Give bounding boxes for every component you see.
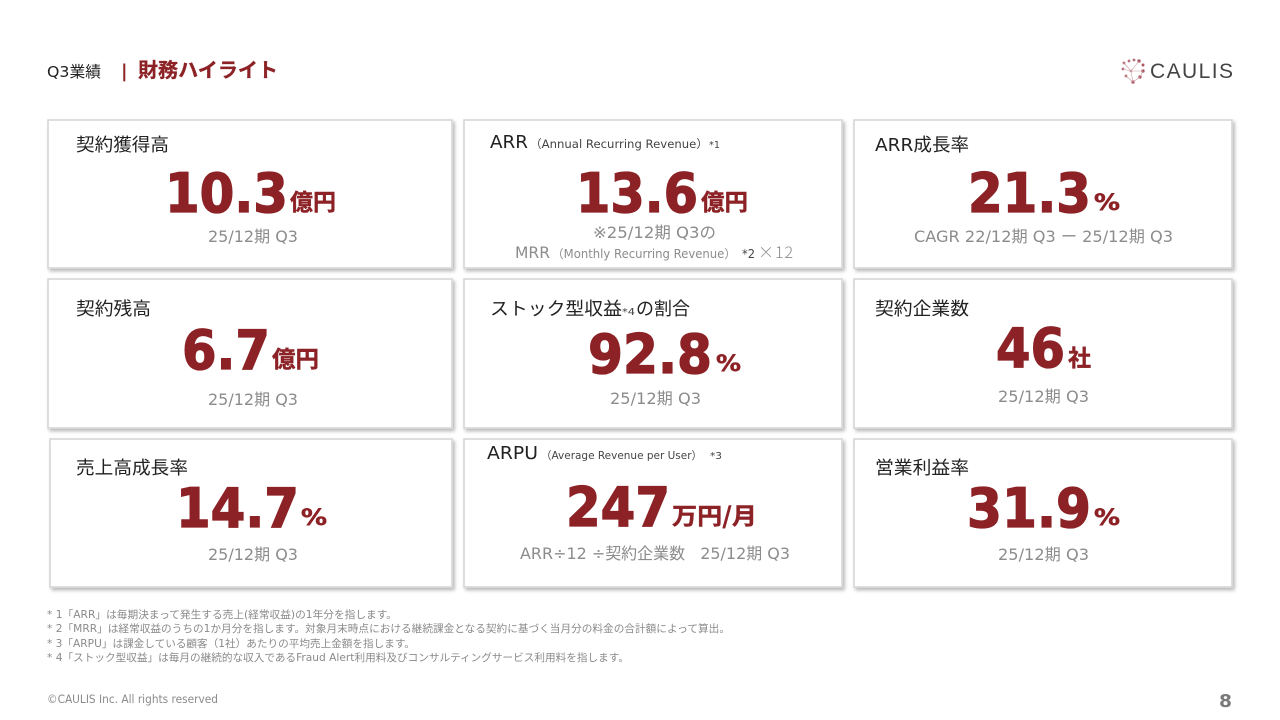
panel: ARR <box>464 120 842 268</box>
panel: ARPU: （Average Revenue per User） <box>541 449 702 462</box>
panel: ARR: *1 <box>709 140 720 151</box>
panel: ARR成長率: 21.3 <box>968 162 1091 225</box>
heading: 財務ハイライト <box>138 58 278 82</box>
panel: 契約残高 <box>48 279 452 428</box>
panel: 契約企業数: 25/12期 Q3 <box>998 387 1089 406</box>
panel: ARR: *2 <box>742 247 755 261</box>
panel: 契約獲得高: 25/12期 Q3 <box>208 227 298 246</box>
panel: ARPU: *3 <box>710 451 722 462</box>
heading <box>47 58 278 82</box>
panel: 契約残高: 億円 <box>272 340 319 374</box>
panel: 契約企業数 <box>854 279 1232 428</box>
panel: 営業利益率: 31.9 <box>967 477 1091 540</box>
panel: ARR: 億円 <box>701 183 748 217</box>
panel: 契約残高: 25/12期 Q3 <box>208 390 298 409</box>
panel: 売上高成長率: % <box>301 506 327 531</box>
panel: ARPU: ARPU <box>487 443 538 464</box>
panel: ARR: ARR <box>490 132 528 153</box>
panel: 営業利益率: 25/12期 Q3 <box>998 545 1089 564</box>
panel: 契約企業数: 社 <box>1068 339 1091 373</box>
panel: 契約獲得高: 億円 <box>290 183 336 217</box>
panel: 売上高成長率: 売上高成長率 <box>76 458 188 479</box>
copyright: ©CAULIS Inc. All rights reserved <box>47 692 218 706</box>
page number: 8 <box>1219 691 1232 712</box>
panel: 契約企業数: 契約企業数 <box>875 299 969 320</box>
panel: ARPU: 247 <box>566 476 670 539</box>
panel: ARR: 13.6 <box>576 162 698 225</box>
logo: CAULIS <box>1122 59 1233 84</box>
panel: 契約残高: 6.7 <box>182 319 270 382</box>
panel: ストック型収益の割合: *4 <box>622 307 635 318</box>
panel: ストック型収益の割合: ストック型収益 <box>490 299 622 320</box>
panel: ARPU: ARR÷12 ÷契約企業数 25/12期 Q3 <box>520 544 790 563</box>
footnotes: * 3「ARPU」は課金している顧客（1社）あたりの平均売上金額を指します。 <box>47 637 415 650</box>
panel: 営業利益率: 営業利益率 <box>875 458 969 479</box>
icon: logo network mark <box>1122 59 1145 84</box>
footnotes: * 2「MRR」は経常収益のうちの1か月分を指します。対象月末時点における継続課金となる契約に基づく当月分の料金の合計額によって算出。 <box>47 622 730 635</box>
panel: ストック型収益の割合: 92.8 <box>588 323 712 386</box>
panel: ARR: MRR <box>515 243 550 262</box>
panel: ARPU <box>464 439 842 587</box>
panel: 契約獲得高 <box>48 120 452 268</box>
panel: 営業利益率 <box>854 439 1232 587</box>
panel: 売上高成長率: 25/12期 Q3 <box>208 545 298 564</box>
panel: ARR: （Annual Recurring Revenue） <box>530 137 708 151</box>
panel: 契約企業数: 46 <box>996 317 1065 380</box>
panel: 売上高成長率: 14.7 <box>176 477 299 540</box>
panel: ARR: ※25/12期 Q3の <box>593 223 716 242</box>
panel: 契約獲得高: 契約獲得高 <box>76 135 169 156</box>
heading: Q3業績 <box>47 63 101 81</box>
panel: ARR: ×12 <box>758 239 793 263</box>
footnotes: * 4「ストック型収益」は毎月の継続的な収入であるFraud Alert利用料及びコンサルティングサービス利用料を指します。 <box>47 651 629 664</box>
heading: | <box>121 61 128 82</box>
panel: 契約獲得高: 10.3 <box>165 162 288 225</box>
panel: 契約残高: 契約残高 <box>76 299 151 320</box>
panel: ARR: （Monthly Recurring Revenue） <box>552 247 736 261</box>
panel: ストック型収益の割合 <box>464 279 842 428</box>
panel: ストック型収益の割合: 25/12期 Q3 <box>610 389 701 408</box>
panel: ARR成長率 <box>854 120 1232 268</box>
footnotes: * 1「ARR」は毎期決まって発生する売上(経常収益)の1年分を指します。 <box>47 608 397 621</box>
panel: ストック型収益の割合: の割合 <box>636 299 690 320</box>
panel: ARR成長率: % <box>1094 191 1120 216</box>
footnotes <box>47 608 730 664</box>
panel: ARR成長率: ARR成長率 <box>875 135 969 156</box>
logo: CAULIS: CAULIS <box>1150 60 1233 83</box>
panel: 売上高成長率 <box>50 439 452 587</box>
panel: 営業利益率: % <box>1094 506 1120 531</box>
panel: ARPU: 万円/月 <box>672 497 757 531</box>
panel: ストック型収益の割合: % <box>716 352 741 377</box>
panel: ARR成長率: CAGR 22/12期 Q3 ー 25/12期 Q3 <box>914 227 1173 246</box>
